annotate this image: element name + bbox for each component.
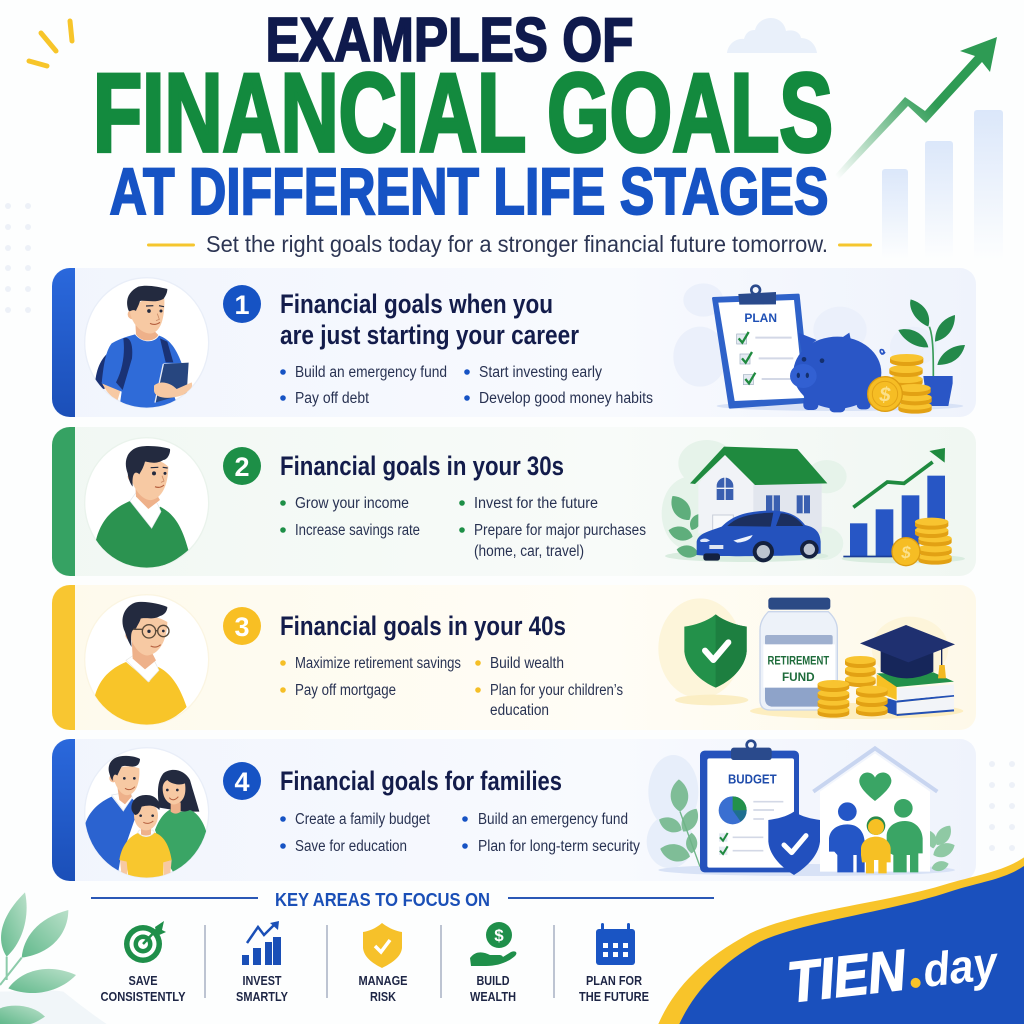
illustration: plan clipboard, piggy bank, coins and plant: $ <box>878 384 891 406</box>
panel 1 bullet list: Start investing early <box>479 364 602 381</box>
key area labels: THE FUTURE <box>579 989 649 1004</box>
panel 2 background <box>52 427 976 576</box>
panel 1 bullet list: Pay off debt <box>295 390 370 407</box>
logo: TIEN.day <box>784 927 1003 1015</box>
title line 3: AT DIFFERENT LIFE STAGES <box>110 154 828 228</box>
avatar: man in green sweater <box>85 438 209 568</box>
number badge 1 <box>223 285 261 323</box>
icon: cloud <box>727 18 817 53</box>
illustration: shield, retirement jar, coins, books and cap: FUND <box>782 670 815 684</box>
panel 3 bullet list: Pay off mortgage <box>295 682 396 699</box>
panel 3 bullet list: Maximize retirement savings <box>295 655 461 672</box>
panel 2 heading: Financial goals in your 30s <box>280 451 564 481</box>
panel 4 bullet list: Build an emergency fund <box>478 811 628 828</box>
illustration: budget clipboard, shield and family house <box>647 741 957 876</box>
section heading: KEY AREAS TO FOCUS ON <box>275 889 490 910</box>
panel 2 bullet list: Grow your income <box>295 495 409 512</box>
key area labels: INVEST <box>242 973 282 988</box>
number badge 3: 3 <box>234 612 250 642</box>
icon: yellow shield <box>363 923 402 968</box>
illustration: shield, retirement jar, coins, books and cap: RETIREMENT <box>767 653 830 667</box>
avatar: man with glasses in yellow sweater <box>85 595 209 725</box>
icon: hand holding coin: $ <box>494 926 504 945</box>
section: key areas to focus on <box>91 889 714 1004</box>
panel 3 bullet list: education <box>490 702 549 719</box>
icon: growth arrow <box>834 37 997 180</box>
panel 2 bullet list: (home, car, travel) <box>474 543 584 560</box>
key area labels: BUILD <box>476 973 510 988</box>
number badge 4 <box>223 762 261 800</box>
avatar: family of three <box>85 748 209 878</box>
key area labels: MANAGE <box>358 973 408 988</box>
icon: target <box>124 921 166 963</box>
panel 2 bullet list <box>280 495 646 560</box>
illustration: house, car, rising bars and coins: $ <box>900 543 911 562</box>
icon: growth bars <box>242 921 281 965</box>
panel 3 accent bar <box>52 585 75 730</box>
key area labels: RISK <box>370 989 397 1004</box>
number badge 1: 1 <box>234 290 250 320</box>
number badge 2: 2 <box>234 452 250 482</box>
avatar: young man with backpack <box>85 278 209 408</box>
title line 1: EXAMPLES OF <box>266 6 634 75</box>
icon: yellow sparks <box>29 21 72 66</box>
number badge 3 <box>223 607 261 645</box>
blue corner <box>679 866 1024 1024</box>
subtitle: Set the right goals today for a stronger financial future tomorrow. <box>206 231 828 257</box>
decorative bar chart, top right <box>882 110 1003 260</box>
panel 3 bullet list <box>280 655 623 719</box>
yellow swoosh <box>658 857 1024 1024</box>
decorative dots <box>5 203 1015 851</box>
panel 1 heading <box>280 289 579 350</box>
illustration: plan clipboard, piggy bank, coins and plant <box>673 283 965 414</box>
panel 1 bullet list: Build an emergency fund <box>295 364 447 381</box>
panel 1 bullet list: Develop good money habits <box>479 390 653 407</box>
panel 1 bullet list <box>280 364 653 407</box>
key area labels <box>100 973 649 1004</box>
key area labels: SMARTLY <box>236 989 288 1004</box>
panel 2 bullet list: Increase savings rate <box>295 522 420 539</box>
panel: your 40s <box>52 585 976 730</box>
icon: calendar <box>596 923 635 965</box>
illustration: house, car, rising bars and coins <box>662 440 965 566</box>
panel: your 30s <box>52 427 976 576</box>
panel 2 bullet list: Prepare for major purchases <box>474 522 646 539</box>
panel: just starting your career <box>52 268 976 417</box>
decorative leaves, bottom left <box>0 892 107 1024</box>
panel 2 bullet list: Invest for the future <box>474 495 598 512</box>
panel 4 bullet list <box>280 811 640 855</box>
key area labels: CONSISTENTLY <box>100 989 186 1004</box>
panel 4 accent bar <box>52 739 75 881</box>
key area labels: PLAN FOR <box>586 973 643 988</box>
panel 3 bullet list: Plan for your children’s <box>490 682 623 699</box>
panel 3 heading: Financial goals in your 40s <box>280 611 566 641</box>
panel 3 background <box>52 585 976 730</box>
panel 4 background <box>52 739 976 881</box>
panel 1 accent bar <box>52 268 75 417</box>
panel 2 accent bar <box>52 427 75 576</box>
key area labels: WEALTH <box>470 989 516 1004</box>
brand corner <box>658 857 1024 1024</box>
key area labels: SAVE <box>128 973 158 988</box>
illustration: budget clipboard, shield and family house: BUDGET <box>728 772 777 787</box>
number badge 2 <box>223 447 261 485</box>
panel 4 bullet list: Create a family budget <box>295 811 431 828</box>
panel 4 bullet list: Save for education <box>295 838 407 855</box>
panel 1 heading: are just starting your career <box>280 320 579 350</box>
number badge 4: 4 <box>234 767 250 797</box>
panel 3 bullet list: Build wealth <box>490 655 564 672</box>
illustration: plan clipboard, piggy bank, coins and plant: PLAN <box>744 311 777 325</box>
panel: families <box>52 739 976 881</box>
title <box>93 6 833 228</box>
panel 4 heading: Financial goals for families <box>280 766 562 796</box>
panel 1 background <box>52 268 976 417</box>
panel 4 bullet list: Plan for long-term security <box>478 838 640 855</box>
logo: TIEN.day: day <box>920 935 1002 997</box>
logo: TIEN.day: TIEN <box>784 938 910 1015</box>
icon: hand holding coin <box>470 922 516 966</box>
illustration: shield, retirement jar, coins, books and cap <box>658 598 963 719</box>
panel 1 heading: Financial goals when you <box>280 289 553 319</box>
